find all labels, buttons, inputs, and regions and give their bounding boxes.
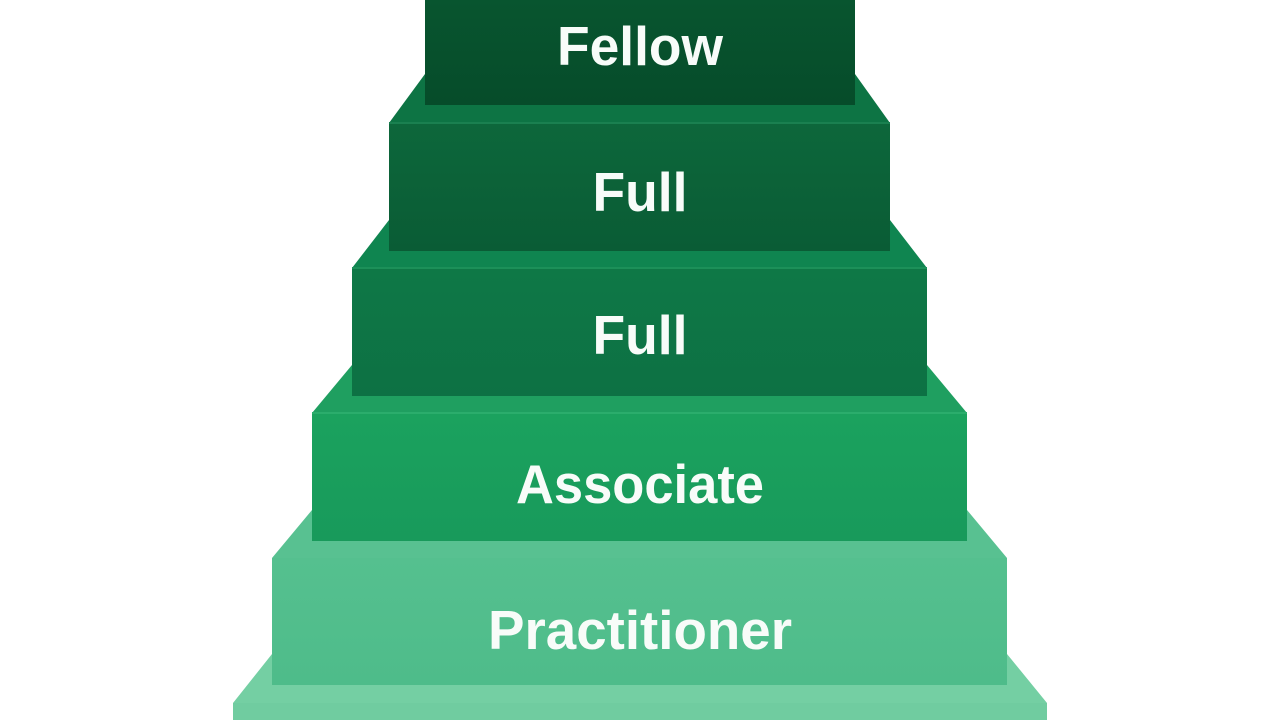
step: Practitioner xyxy=(272,510,1007,685)
label: Fellow: Fellow xyxy=(557,15,723,77)
label: Associate: Associate xyxy=(516,453,764,515)
step: Full (upper) xyxy=(389,74,890,251)
step: Associate xyxy=(312,365,967,541)
step: Fellow xyxy=(425,0,855,105)
label: Full (upper): Full xyxy=(592,161,688,223)
step: Full (lower) xyxy=(352,220,927,396)
label: Full (lower): Full xyxy=(592,304,688,366)
step: base tier xyxy=(233,654,1047,720)
label: Practitioner: Practitioner xyxy=(488,599,792,661)
